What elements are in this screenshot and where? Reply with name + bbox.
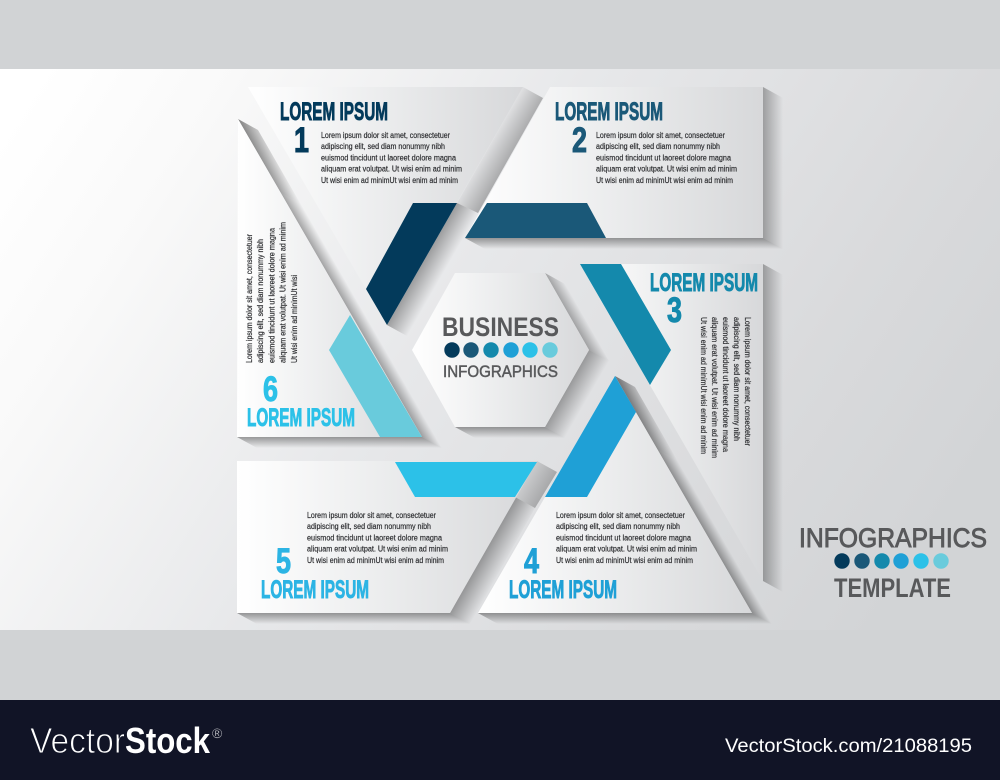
panel 1 body text [321, 131, 462, 185]
panel 5 body text: euismod tincidunt ut laoreet dolore magna [307, 533, 442, 542]
panel 5 heading: LOREM IPSUM [261, 577, 369, 604]
panel 5 body text: Ut wisi enim ad minimUt wisi enim ad minim [307, 556, 444, 565]
panel 4 body text: Ut wisi enim ad minimUt wisi enim ad minim [556, 556, 693, 565]
panel 4 number: 4 [524, 542, 539, 581]
panel 5 body text: Lorem ipsum dolor sit amet, consectetuer [307, 511, 436, 520]
hexagon title: business: BUSINESS [442, 312, 559, 342]
panel 6 heading: LOREM IPSUM [247, 405, 355, 432]
panel 6 shape [237, 119, 422, 437]
panel 2 number: 2 [572, 121, 587, 160]
panel 3 shape [580, 264, 763, 581]
panel 1 number: 1 [294, 121, 309, 160]
panel 1 colour band [366, 203, 457, 325]
panel 2: top right [465, 87, 783, 249]
panel 1 heading: LOREM IPSUM [280, 99, 388, 126]
panel 3 number: 3 [667, 291, 682, 330]
panel 6 body text: aliquam erat volutpat. Ut wisi enim ad minim [279, 222, 288, 363]
panel 5 colour band [395, 462, 537, 497]
panel 2 heading: LOREM IPSUM [555, 99, 663, 126]
panel 3 heading: LOREM IPSUM [650, 270, 758, 297]
panel 3 body text: Ut wisi enim ad minimUt wisi enim ad minim [699, 317, 708, 454]
side title block [799, 523, 987, 603]
panel 3 body text: aliquam erat volutpat. Ut wisi enim ad minim [710, 317, 719, 458]
footer bar [0, 700, 1000, 780]
panel 4 body text: aliquam erat volutpat. Ut wisi enim ad minim [556, 545, 697, 554]
panel 6 body text: euismod tincidunt ut laoreet dolore magna [267, 228, 276, 363]
panel 1 body text: Ut wisi enim ad minimUt wisi enim ad minim [321, 176, 458, 185]
panel 1 body text: aliquam erat volutpat. Ut wisi enim ad minim [321, 165, 462, 174]
panel 5 body text: aliquam erat volutpat. Ut wisi enim ad minim [307, 545, 448, 554]
side title: infographics: INFOGRAPHICS [799, 523, 987, 553]
panel 2 body text: Lorem ipsum dolor sit amet, consectetuer [596, 131, 725, 140]
panel 4 shape [478, 376, 752, 613]
hexagon colour dots [444, 342, 558, 358]
hexagon subtitle: infographics: INFOGRAPHICS [443, 362, 558, 381]
panel 2 shape [465, 87, 763, 238]
panel 3: right triangle [580, 264, 783, 592]
panel 6 body text [245, 222, 299, 363]
panel 4 body text [556, 511, 697, 565]
hexagon shape [412, 273, 589, 427]
panel 6 body text: Ut wisi enim ad minimUt wisi [290, 275, 299, 363]
panel 2 body text: aliquam erat volutpat. Ut wisi enim ad minim [596, 165, 737, 174]
panel 2 colour band [465, 203, 606, 238]
panel 5 number: 5 [276, 542, 291, 581]
panel 6 number: 6 [263, 370, 278, 409]
panel 4 body text: Lorem ipsum dolor sit amet, consectetuer [556, 511, 685, 520]
panel 2 body text: adipiscing elit, sed diam nonummy nibh [596, 142, 720, 151]
panel 2 body text [596, 131, 737, 185]
panel 3 body text: euismod tincidunt ut laoreet dolore magna [721, 317, 730, 452]
panel 5 body text [307, 511, 448, 565]
panel 3 body text [699, 317, 752, 458]
panel 4 body text: euismod tincidunt ut laoreet dolore magna [556, 533, 691, 542]
panel 1: top triangle [248, 87, 543, 336]
side title: template: TEMPLATE [834, 573, 951, 603]
footer logo: Vector [30, 720, 125, 761]
panel 4 heading: LOREM IPSUM [509, 577, 617, 604]
panel 6 body text: adipiscing elit, sed diam nonummy nibh [256, 239, 265, 363]
panel 4: bottom triangle [478, 376, 772, 624]
panel 4 colour band [545, 376, 636, 497]
panel 1 body text: adipiscing elit, sed diam nonummy nibh [321, 142, 445, 151]
panel 1 body text: euismod tincidunt ut laoreet dolore magna [321, 153, 456, 162]
centre hexagon [412, 273, 609, 438]
panel 2 body text: Ut wisi enim ad minimUt wisi enim ad minim [596, 176, 733, 185]
panel 2 body text: euismod tincidunt ut laoreet dolore magna [596, 153, 731, 162]
footer image id: VectorStock.com/21088195 [725, 736, 972, 757]
panel 5: bottom left [237, 461, 557, 624]
panel 6 body text: Lorem ipsum dolor sit amet, consectetuer [245, 234, 254, 363]
panel 4 body text: adipiscing elit, sed diam nonummy nibh [556, 522, 680, 531]
panel 3 body text: Lorem ipsum dolor sit amet, consectetuer [743, 317, 752, 446]
footer logo: ® [212, 725, 223, 741]
side colour dots [834, 553, 949, 569]
panel 1 body text: Lorem ipsum dolor sit amet, consectetuer [321, 131, 450, 140]
footer logo: Stock [125, 720, 211, 761]
panel 5 shape [237, 461, 537, 613]
panel 1 shape [248, 87, 523, 325]
panel 6: left triangle [237, 119, 442, 448]
panel 3 colour band [580, 264, 671, 385]
panel 3 body text: adipiscing elit, sed diam nonummy nibh [732, 317, 741, 441]
footer logo [30, 720, 223, 761]
panel 6 colour band [329, 315, 422, 437]
panel 5 body text: adipiscing elit, sed diam nonummy nibh [307, 522, 431, 531]
